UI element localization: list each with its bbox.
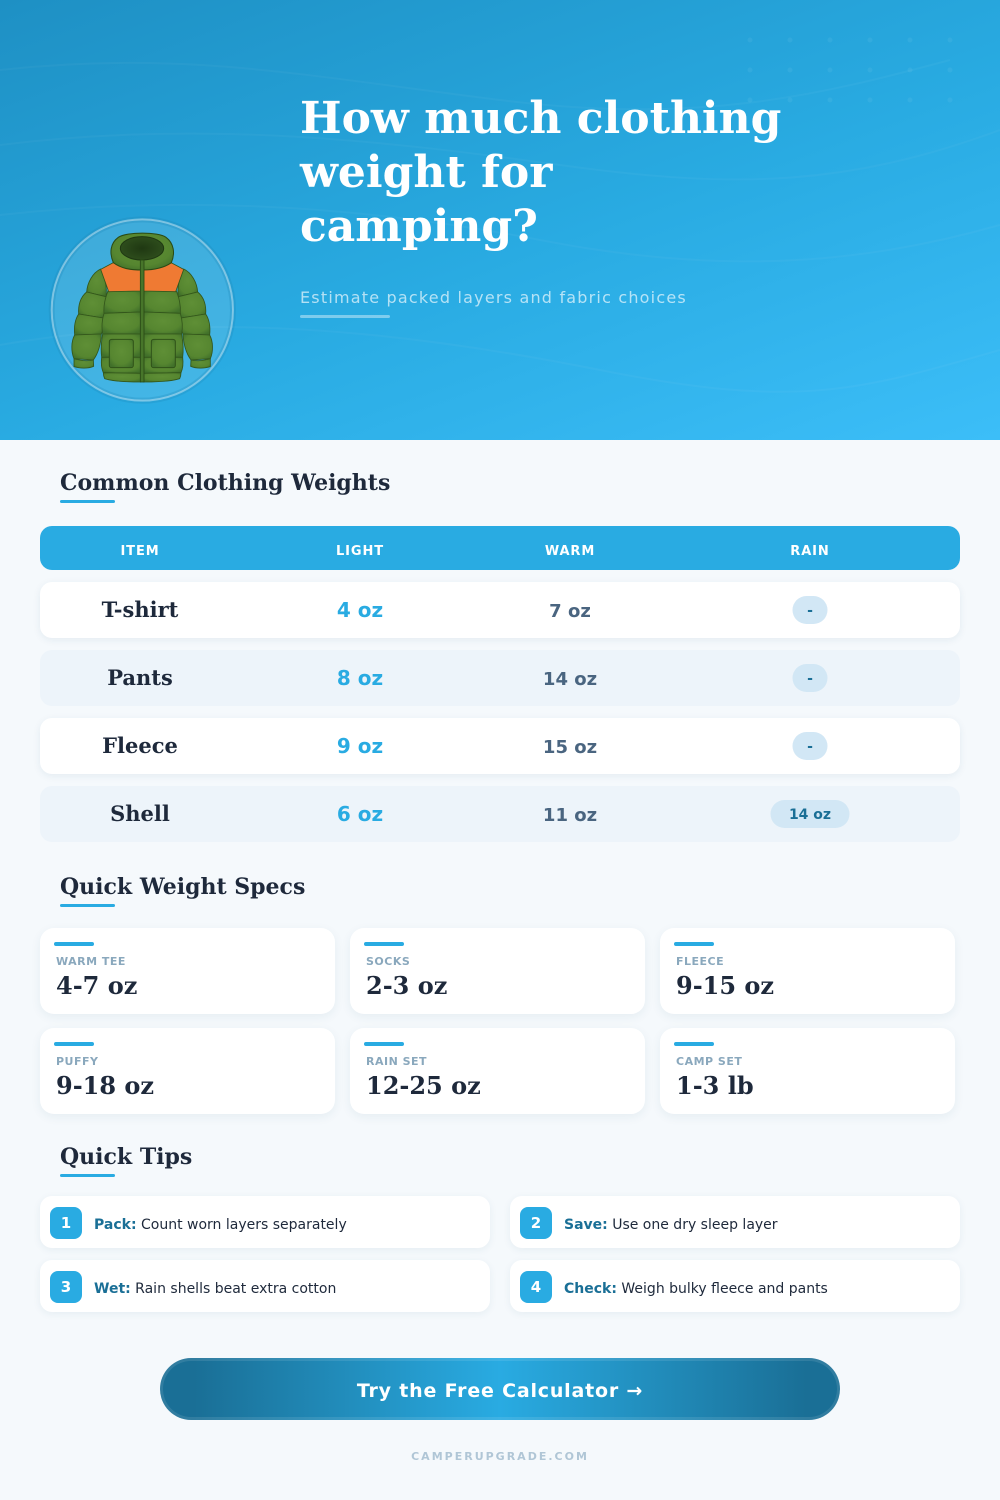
table row: T-shirt: 7 oz — [549, 601, 591, 622]
call to action button: Try the Free Calculator → — [357, 1380, 643, 1402]
spec card: warm tee: WARM TEE — [56, 955, 126, 968]
spec card: puffy — [40, 1028, 335, 1114]
table row: Pants: - — [807, 671, 813, 687]
spec card: socks: SOCKS — [366, 955, 410, 968]
heading: quick weight specs: Quick Weight Specs — [60, 874, 305, 900]
table row: T-shirt — [40, 582, 960, 638]
title: camping? — [300, 201, 538, 252]
table row: Shell: 11 oz — [543, 805, 597, 826]
tip 1: Pack: Count worn layers separately — [94, 1217, 347, 1233]
spec card: warm tee: 4-7 oz — [56, 971, 137, 1000]
tip 3 — [40, 1260, 490, 1312]
footer: CAMPERUPGRADE.COM — [411, 1450, 589, 1463]
header decoration: waves and dots — [748, 38, 952, 102]
table row: Shell — [40, 786, 960, 842]
spec card: puffy: PUFFY — [56, 1055, 98, 1068]
table header: ITEM — [120, 544, 160, 559]
table row: Shell: 6 oz — [337, 802, 383, 826]
spec card: rain set: 12-25 oz — [366, 1071, 481, 1100]
table header: LIGHT — [336, 544, 384, 559]
table row: T-shirt: - — [807, 603, 813, 619]
heading: quick tips: Quick Tips — [60, 1144, 192, 1170]
table row: Fleece: Fleece — [102, 733, 178, 758]
tip 4: Check: Weigh bulky fleece and pants — [564, 1281, 828, 1297]
spec card: rain set: RAIN SET — [366, 1055, 427, 1068]
tip 2: Save: Use one dry sleep layer — [564, 1217, 778, 1233]
table row: Shell: Shell — [110, 801, 170, 826]
title — [300, 93, 781, 252]
panel: header banner — [0, 0, 1000, 440]
spec card: rain set — [350, 1028, 645, 1114]
title: How much clothing — [300, 93, 781, 144]
tip 2 — [510, 1196, 960, 1248]
subtitle: Estimate packed layers and fabric choices — [300, 288, 687, 307]
table row: Fleece — [40, 718, 960, 774]
spec card: fleece — [660, 928, 955, 1014]
table row: Fleece: - — [807, 739, 813, 755]
subtitle underline — [300, 315, 390, 318]
spec card: warm tee — [40, 928, 335, 1014]
tip 2: 2 — [531, 1214, 541, 1232]
call to action button — [160, 1358, 840, 1420]
table header: RAIN — [790, 544, 830, 559]
table row: Pants: 14 oz — [543, 669, 597, 690]
tip 4 — [510, 1260, 960, 1312]
table row: Fleece: 15 oz — [543, 737, 597, 758]
table row: Shell: 14 oz — [789, 807, 831, 823]
spec card: socks — [350, 928, 645, 1014]
tip 3: Wet: Rain shells beat extra cotton — [94, 1281, 336, 1297]
icon: puffer jacket in circle — [49, 216, 236, 404]
spec card: camp set — [660, 1028, 955, 1114]
table row: Fleece: 9 oz — [337, 734, 383, 758]
spec card: camp set: 1-3 lb — [676, 1071, 754, 1100]
table row: T-shirt: T-shirt — [102, 597, 178, 622]
table row: Pants: 8 oz — [337, 666, 383, 690]
spec card: camp set: CAMP SET — [676, 1055, 742, 1068]
spec card: fleece: FLEECE — [676, 955, 724, 968]
table row: Pants — [40, 650, 960, 706]
table header: WARM — [545, 544, 595, 559]
title: weight for — [300, 147, 552, 198]
spec card: fleece: 9-15 oz — [676, 971, 774, 1000]
spec card: puffy: 9-18 oz — [56, 1071, 154, 1100]
heading: common clothing weights: Common Clothing Weights — [60, 470, 390, 496]
table header — [40, 526, 960, 570]
table row: T-shirt: 4 oz — [337, 598, 383, 622]
spec card: socks: 2-3 oz — [366, 971, 447, 1000]
tip 1 — [40, 1196, 490, 1248]
tip 1: 1 — [61, 1214, 71, 1232]
tip 4: 4 — [531, 1278, 541, 1296]
tip 3: 3 — [61, 1278, 71, 1296]
table row: Pants: Pants — [107, 665, 173, 690]
